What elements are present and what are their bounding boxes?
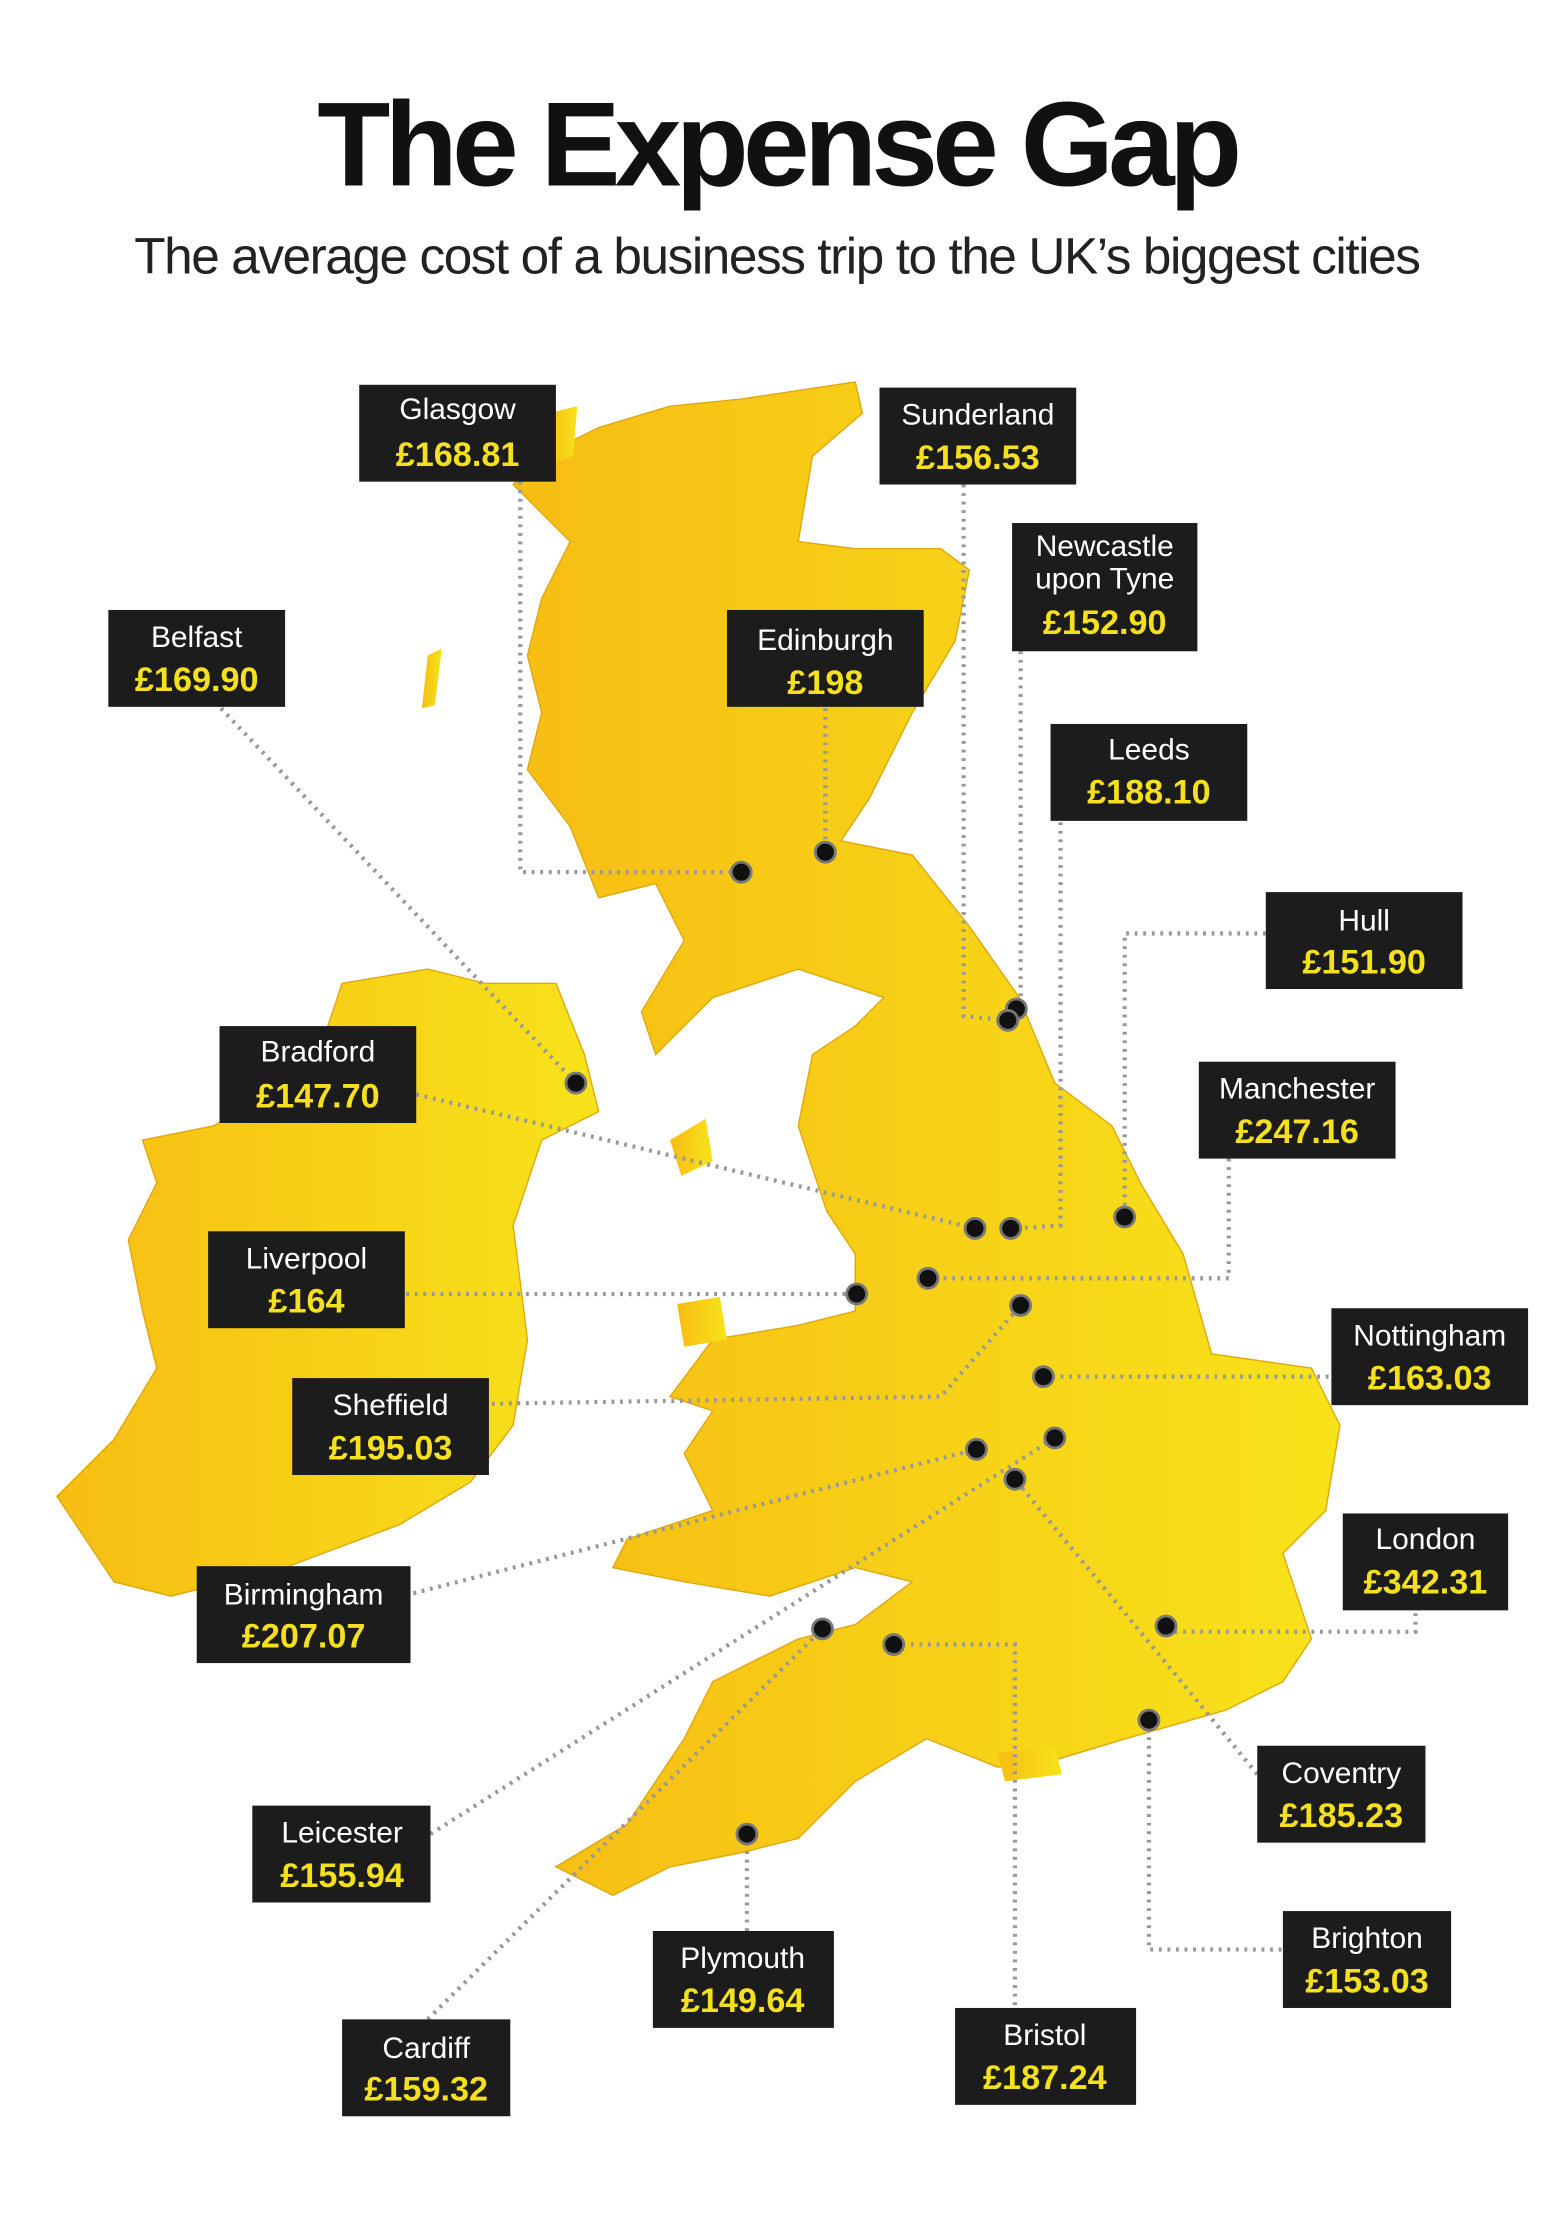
label: Leeds bbox=[1051, 724, 1247, 821]
label: Liverpool: Liverpool bbox=[246, 1242, 367, 1275]
label: Edinburgh: Edinburgh bbox=[757, 624, 894, 657]
label: Plymouth: £149.64 bbox=[681, 1982, 804, 2020]
label: Bristol: £187.24 bbox=[983, 2059, 1107, 2097]
label: Belfast bbox=[108, 610, 285, 707]
label: Edinburgh: £198 bbox=[787, 664, 863, 702]
label: Birmingham: £207.07 bbox=[242, 1617, 365, 1655]
label: Bradford bbox=[220, 1026, 416, 1123]
label: Glasgow bbox=[359, 385, 556, 482]
label: Sheffield bbox=[292, 1378, 489, 1475]
title: The Expense Gap bbox=[317, 78, 1238, 211]
label: Manchester: £247.16 bbox=[1235, 1113, 1359, 1151]
map: islands bbox=[422, 406, 1062, 1781]
label: Sheffield: Sheffield bbox=[333, 1389, 449, 1422]
label: Brighton: £153.03 bbox=[1305, 1962, 1429, 2000]
label: Manchester bbox=[1199, 1062, 1396, 1159]
label: Leeds: Leeds bbox=[1108, 734, 1190, 767]
label: Plymouth bbox=[653, 1931, 834, 2028]
label: Nottingham: Nottingham bbox=[1353, 1319, 1506, 1352]
label: Sheffield: £195.03 bbox=[329, 1429, 452, 1467]
label: Leicester bbox=[252, 1806, 430, 1903]
label: Leeds: £188.10 bbox=[1087, 774, 1211, 812]
label: Hull: Hull bbox=[1338, 905, 1390, 938]
label: Belfast: £169.90 bbox=[135, 661, 259, 699]
map: Great Britain bbox=[513, 382, 1340, 1895]
label: Nottingham bbox=[1331, 1308, 1528, 1405]
label: Newcastle upon Tyne: upon Tyne bbox=[1035, 563, 1174, 596]
label: Brighton bbox=[1283, 1911, 1451, 2008]
label: Belfast: Belfast bbox=[151, 621, 243, 654]
label: Brighton: Brighton bbox=[1311, 1922, 1423, 1955]
label: Liverpool bbox=[208, 1231, 405, 1328]
label: Cardiff: £159.32 bbox=[364, 2071, 488, 2109]
label: Manchester: Manchester bbox=[1219, 1073, 1375, 1106]
label: Glasgow: Glasgow bbox=[399, 393, 516, 426]
label: Sunderland: £156.53 bbox=[916, 439, 1040, 477]
label: Birmingham bbox=[197, 1566, 411, 1663]
label: Nottingham: £163.03 bbox=[1368, 1359, 1492, 1397]
label: Coventry: £185.23 bbox=[1280, 1797, 1403, 1835]
label: London bbox=[1343, 1513, 1508, 1610]
label: Leicester: Leicester bbox=[281, 1817, 403, 1850]
label: Cardiff: Cardiff bbox=[382, 2032, 471, 2065]
label: Newcastle upon Tyne bbox=[1012, 523, 1197, 651]
label: Sunderland: Sunderland bbox=[901, 399, 1054, 432]
label: Birmingham: Birmingham bbox=[224, 1579, 383, 1612]
label: Sunderland bbox=[880, 388, 1076, 485]
label: Liverpool: £164 bbox=[268, 1283, 345, 1321]
label: Coventry bbox=[1257, 1746, 1425, 1843]
label: Newcastle upon Tyne: Newcastle bbox=[1036, 530, 1174, 563]
label: Plymouth: Plymouth bbox=[680, 1942, 805, 1975]
label: London: £342.31 bbox=[1364, 1563, 1487, 1601]
label: Edinburgh bbox=[727, 610, 924, 707]
label: Hull: £151.90 bbox=[1302, 943, 1426, 981]
label: Bristol: Bristol bbox=[1003, 2019, 1086, 2052]
label: Newcastle upon Tyne: £152.90 bbox=[1043, 604, 1167, 642]
connector lines bbox=[221, 482, 1415, 2019]
label: Bristol bbox=[955, 2008, 1136, 2105]
map: Ireland bbox=[57, 969, 599, 1596]
label: Coventry: Coventry bbox=[1281, 1757, 1401, 1790]
label: London: London bbox=[1376, 1523, 1475, 1556]
label: Glasgow: £168.81 bbox=[396, 436, 519, 474]
label: Hull bbox=[1266, 892, 1463, 989]
label: Cardiff bbox=[342, 2019, 510, 2116]
label: Bradford: Bradford bbox=[260, 1036, 375, 1069]
subtitle: The average cost of a business trip to the UK’s biggest cities bbox=[134, 228, 1419, 285]
city dots bbox=[566, 842, 1176, 1844]
label: Leicester: £155.94 bbox=[280, 1857, 404, 1895]
label: Bradford: £147.70 bbox=[256, 1077, 380, 1115]
